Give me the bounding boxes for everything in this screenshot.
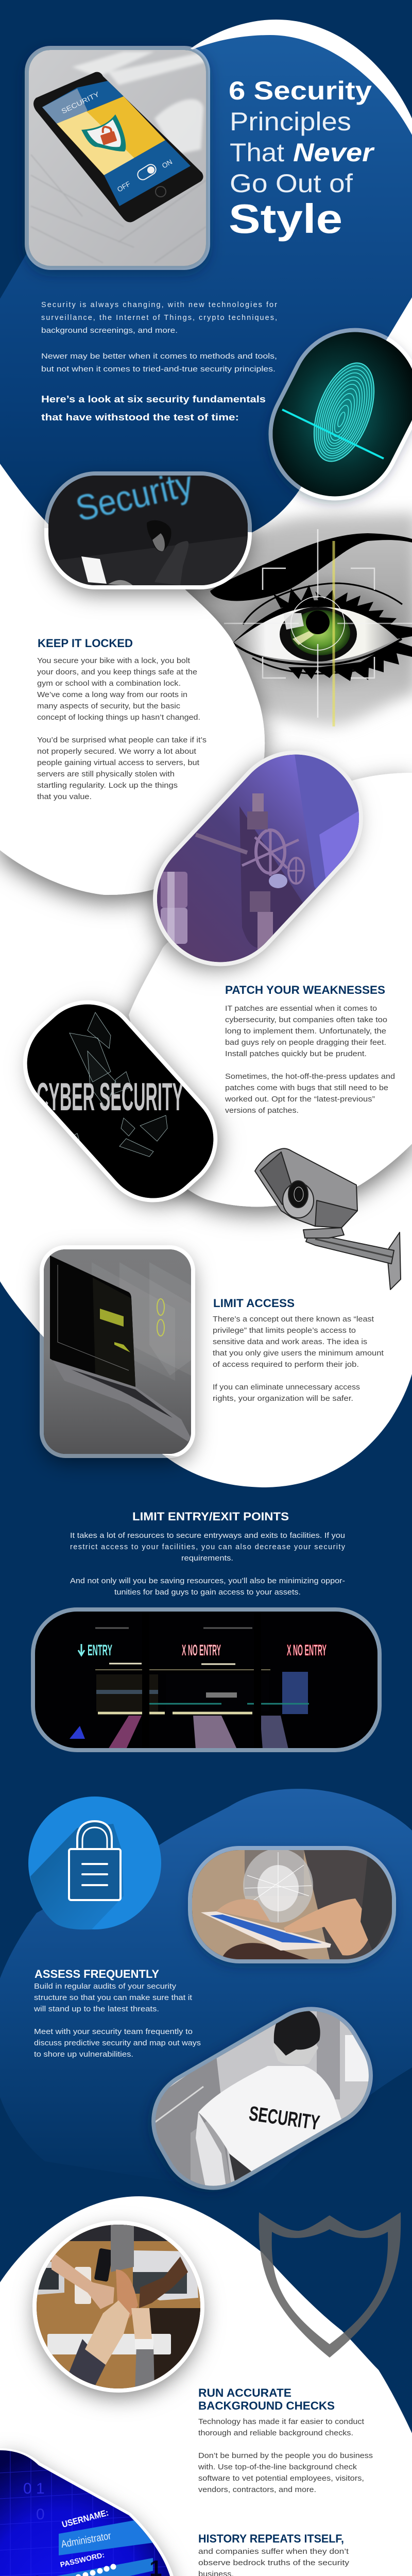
text block: limit access: LIMIT ACCESS — [213, 1297, 295, 1310]
title — [229, 76, 375, 242]
panel: lock icon circle — [28, 1797, 161, 1929]
text block: limit entry exit points: tunities for bad guys to gain access to your assets. — [114, 1588, 301, 1597]
fingerprint ridges — [313, 363, 375, 462]
eyebrow — [210, 533, 412, 601]
panel: laptop image — [42, 1247, 193, 1456]
wall plate — [388, 1232, 401, 1290]
text block: keep it locked: We’ve come a long way from our roots in — [37, 691, 187, 699]
title: Principles — [230, 107, 351, 136]
text block: intro — [41, 301, 277, 374]
text block: history repeats itself: observe bedrock truths of the security — [198, 2559, 350, 2567]
panel: security guard image — [135, 1991, 389, 2206]
text block: keep it locked: not properly secured. We worry a lot about — [37, 748, 196, 756]
title: Go Out of — [230, 169, 353, 198]
text block: limit access — [213, 1297, 384, 1403]
text block: keep it locked: You secure your bike with a lock, you bolt — [37, 657, 190, 665]
shape: large blue header blob — [0, 35, 412, 567]
text block: limit access: If you can eliminate unnecessary access — [213, 1383, 360, 1392]
panel: fingerprint image — [266, 328, 412, 510]
text block: history repeats itself: and companies suffer when they don’t — [198, 2548, 349, 2556]
eyelid and lashes — [232, 585, 412, 644]
text block: patch your weaknesses — [225, 984, 395, 1115]
translucent data panels — [92, 1262, 175, 1381]
hand — [284, 1899, 373, 1956]
lower lid — [233, 639, 402, 665]
text block: limit access: There’s a concept out there known as “least — [213, 1315, 374, 1324]
wet floor reflections — [108, 1716, 142, 1749]
text block: limit entry exit points: restrict access to your facilities, you can also decrease your security — [70, 1543, 346, 1551]
vault wall right — [294, 747, 371, 912]
text block: assess frequently: Build in regular audits of your security — [34, 1982, 177, 1991]
phone yellow band — [57, 96, 165, 175]
text block: run accurate background checks: Don’t be burned by the people you do business — [198, 2452, 373, 2460]
shield icon — [81, 114, 126, 151]
text block: run accurate background checks: vendors, contractors, and more. — [198, 2486, 316, 2494]
title: That — [230, 138, 284, 167]
text block: intro lead-in — [41, 394, 266, 422]
vault wheels — [242, 829, 304, 884]
text block: assess frequently: will stand up to the latest threats. — [33, 2005, 159, 2013]
pupil — [306, 611, 330, 634]
escalator — [147, 2056, 232, 2191]
icon: shield outline — [259, 2212, 401, 2358]
home button — [156, 187, 166, 197]
text block: patch your weaknesses: cybersecurity, but companies often take too — [225, 1016, 387, 1024]
text block: patch your weaknesses: PATCH YOUR WEAKNESSES — [225, 984, 385, 996]
shape: white panel keep it locked — [0, 361, 265, 895]
text block: patch your weaknesses: versions of patches. — [225, 1107, 299, 1115]
lower lashes — [288, 641, 412, 681]
panel: tablet image — [190, 1848, 394, 1961]
phone screen labels: SECURITY — [60, 90, 100, 115]
neon signs — [78, 1644, 84, 1655]
screen chart — [100, 1309, 124, 1327]
panel: vault image — [128, 726, 388, 991]
iris highlights — [283, 613, 304, 630]
text block: keep it locked: concept of locking things up hasn’t changed. — [37, 714, 200, 722]
text block: assess frequently: ASSESS FREQUENTLY — [35, 1968, 159, 1980]
hair — [273, 2037, 318, 2065]
laptop — [81, 556, 107, 584]
text block: patch your weaknesses: Sometimes, the hot-off-the-press updates and — [225, 1073, 395, 1081]
pillar — [317, 2007, 340, 2099]
guard arm and belt — [196, 2112, 227, 2191]
text block: patch your weaknesses: Install patches quickly but be prudent. — [225, 1050, 367, 1058]
password label: PASSWORD: — [59, 2551, 105, 2569]
text block: history repeats itself: HISTORY REPEATS ITSELF, — [198, 2532, 344, 2545]
text block: assess frequently: discuss predictive security and map out ways — [34, 2039, 201, 2047]
upper crease — [243, 583, 402, 624]
network orb — [243, 1849, 313, 1923]
camera neck — [303, 1228, 344, 1238]
phones — [94, 2248, 113, 2282]
text block: intro lead-in: that have withstood the test of time: — [41, 412, 239, 422]
text block: keep it locked: KEEP IT LOCKED — [38, 637, 133, 650]
text block: run accurate background checks: thorough and reliable background checks. — [198, 2429, 353, 2437]
padlock icon — [100, 131, 117, 145]
scan beam — [282, 410, 384, 459]
gate pillars and opening — [96, 1674, 158, 1711]
text block: limit access: sensitive data and work areas. The idea is — [213, 1338, 367, 1346]
shape: white panel patch your weaknesses — [129, 773, 412, 1207]
sleeves — [111, 2223, 134, 2272]
phone top bar — [42, 81, 124, 124]
shape: white arc behind header — [154, 20, 412, 335]
text block: limit entry exit points: It takes a lot of resources to secure entryways and exits to facilities. If you — [70, 1532, 345, 1540]
panel: password image: 0 — [36, 2506, 45, 2523]
text block: keep it locked: your doors, and you keep things safe at the — [37, 668, 197, 676]
lock long shadow — [30, 1824, 124, 1929]
shattered glass — [62, 1012, 167, 1167]
text block: keep it locked: You’d be surprised what people can take if it’s — [37, 736, 207, 744]
text block: patch your weaknesses: long to implement them. Unfortunately, the — [225, 1027, 386, 1036]
panel: password image — [0, 2447, 180, 2576]
lock body — [69, 1849, 121, 1900]
text block: run accurate background checks: software to vet potential employees, visitors, — [198, 2475, 364, 2483]
vault hinges — [161, 872, 187, 908]
text block: intro: surveillance, the Internet of Things, crypto techniques, — [41, 314, 277, 322]
sclera — [233, 604, 398, 661]
panel: teamwork image — [31, 2221, 206, 2396]
bolt bar — [196, 835, 247, 853]
knee — [221, 1943, 309, 1959]
tablet — [201, 1911, 331, 1951]
text block: limit entry exit points — [70, 1510, 346, 1597]
text block: assess frequently: structure so that you can make sure that it — [34, 1994, 192, 2002]
password field — [57, 2558, 153, 2576]
text block: keep it locked: gym or school with a combination lock. — [37, 680, 181, 688]
shirt lettering: SECURITY — [248, 2102, 321, 2134]
screen word: Security — [72, 463, 196, 529]
text block: intro: but not when it comes to tried-and-true security principles. — [41, 365, 276, 374]
vault door panel — [239, 806, 309, 948]
man silhouette — [154, 541, 188, 585]
text block: limit access: of access required to perform their job. — [213, 1361, 359, 1369]
text block: run accurate background checks: BACKGROUND CHECKS — [198, 2399, 335, 2412]
camera lens ring — [283, 1183, 314, 1218]
panel: password image: Administrator — [60, 2530, 112, 2550]
laptop screen — [50, 1256, 135, 1387]
panel: security camera illustration — [255, 1148, 401, 1290]
background: navy header band — [0, 0, 412, 330]
panel: entry gate image: X NO ENTRY — [287, 1642, 327, 1659]
wood texture — [72, 52, 206, 155]
ceiling lights — [95, 1627, 252, 1629]
title: Never — [293, 138, 375, 167]
panel: phone image — [27, 48, 208, 268]
panel: phone image: ON — [161, 158, 174, 170]
text block: keep it locked: startling regularity. Lock up the things — [37, 782, 178, 790]
shape: blue blob assess frequently — [0, 1789, 412, 2195]
text block: intro: Newer may be better when it comes to methods and tools, — [41, 352, 277, 361]
panel: phone image: OFF — [116, 180, 132, 194]
camera arm — [306, 1233, 394, 1264]
text block: assess frequently: to shore up vulnerabilities. — [34, 2050, 133, 2059]
phone lower band — [104, 140, 191, 206]
text block: run accurate background checks: RUN ACCURATE — [198, 2386, 291, 2399]
text block: limit entry exit points: LIMIT ENTRY/EXIT POINTS — [132, 1510, 289, 1523]
scan lines — [224, 529, 412, 726]
text block: patch your weaknesses: bad guys rely on people dragging their feet. — [225, 1039, 386, 1047]
text block: patch your weaknesses: IT patches are essential when it comes to — [225, 1005, 377, 1013]
camera body — [255, 1148, 357, 1228]
shape: white panel limit access — [0, 1226, 412, 1487]
panel: cyber security image — [4, 981, 236, 1221]
title: 6 Security — [229, 76, 372, 105]
password grid — [0, 2447, 180, 2576]
text block: keep it locked — [37, 637, 207, 801]
text block: assess frequently: Meet with your security team frequently to — [34, 2028, 193, 2036]
iris — [280, 607, 357, 662]
binary digits — [31, 2556, 162, 2576]
text block: keep it locked: people gaining virtual access to servers, but — [37, 759, 199, 767]
panel: cyber security image: CYBER SECURITY — [37, 1075, 183, 1119]
laptops — [31, 2262, 64, 2295]
shape: white panel background checks — [0, 2196, 412, 2473]
text block: intro lead-in: Here’s a look at six security fundamentals — [41, 394, 266, 404]
cap — [274, 2009, 320, 2056]
guard shirt — [198, 2066, 348, 2179]
panel: eye scan image — [175, 513, 412, 726]
sockets — [47, 2334, 171, 2354]
text block: run accurate background checks: Technology has made it far easier to conduct — [198, 2418, 364, 2426]
camera hood opening — [260, 1152, 291, 1205]
text block: intro: background screenings, and more. — [41, 327, 178, 335]
text block: history repeats itself — [198, 2532, 354, 2576]
text block: run accurate background checks — [198, 2386, 373, 2494]
text block: limit access: that you only give users the minimum amount — [213, 1349, 384, 1358]
background: navy middle section — [0, 1273, 412, 2437]
panel: entry gate image — [33, 1609, 380, 1751]
username label: USERNAME: — [61, 2507, 110, 2530]
panel: security hacker image — [46, 463, 250, 587]
lock shackle — [77, 1821, 112, 1850]
text block: intro: Security is always changing, with new technologies for — [41, 301, 277, 309]
panel: entry gate image: ENTRY — [88, 1642, 112, 1659]
text block: keep it locked: that you value. — [37, 793, 92, 801]
fists — [52, 2251, 114, 2309]
text block: keep it locked: many aspects of security, but the basic — [37, 702, 180, 710]
text block: limit entry exit points: And not only will you be saving resources, you’ll also be minimizing oppor- — [70, 1577, 345, 1585]
text block: keep it locked: servers are still physically stolen with — [37, 770, 175, 778]
phone body — [33, 72, 203, 222]
panel: entry gate image: X NO ENTRY — [182, 1642, 221, 1659]
panel: password image: 0 1 — [23, 2480, 45, 2497]
text block: patch your weaknesses: worked out. Opt for the “latest-previous” — [225, 1095, 375, 1104]
title: Style — [229, 196, 342, 242]
eye socket shadow — [242, 582, 397, 680]
text block: limit entry exit points: requirements. — [181, 1554, 233, 1563]
text block: limit access: privilege” that limits people’s access to — [213, 1327, 356, 1335]
text block: limit access: rights, your organization will be safer. — [213, 1395, 353, 1403]
dial widgets — [157, 1299, 164, 1336]
text block: patch your weaknesses: patches come with bugs that still need to be — [225, 1084, 388, 1092]
username field — [59, 2517, 154, 2555]
text block: run accurate background checks: with. Use top-of-the-line background check — [198, 2463, 357, 2471]
text block: assess frequently — [33, 1968, 201, 2059]
toggle — [137, 164, 157, 180]
laptop keyboard base — [53, 1360, 191, 1442]
